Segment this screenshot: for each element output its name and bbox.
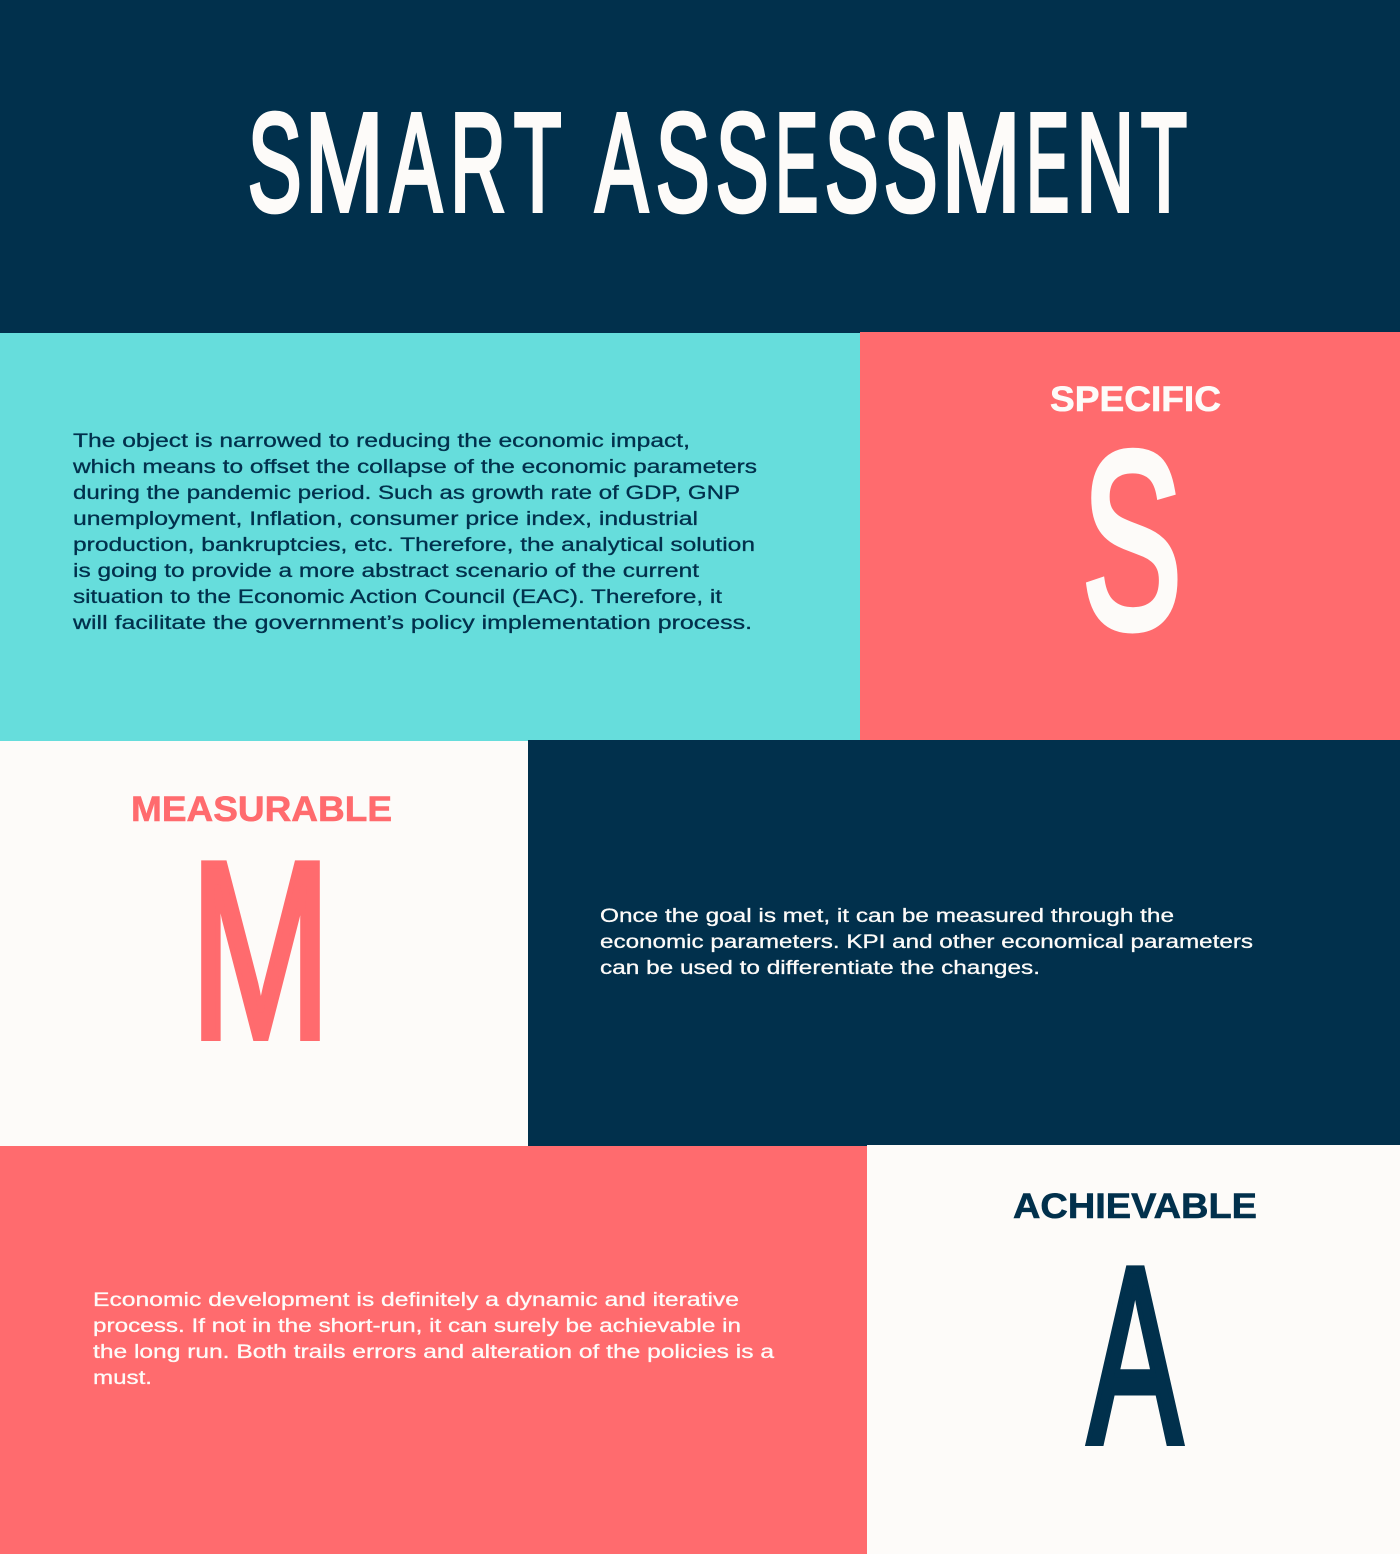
text block: achievable description: Economic development is definitely a dynamic and iterative [93,1289,739,1311]
heading: achievable: ACHIEVABLE [1013,1187,1257,1226]
panel: specific description [0,333,860,741]
text block: specific description: will facilitate the government’s policy implementation process. [72,612,752,634]
title: S [884,84,938,240]
letter M: M [190,811,331,1091]
text block: specific description: is going to provide a more abstract scenario of the current [73,560,700,582]
panel: achievable [867,1145,1400,1554]
text block: achievable description [93,1289,774,1389]
text block: specific description: The object is narrowed to reducing the economic impact, [73,430,690,452]
text block: specific description: during the pandemic period. Such as growth rate of GDP, GNP [73,482,740,504]
heading: measurable: MEASURABLE [131,790,392,829]
text block: achievable description: the long run. Both trails errors and alteration of the policies is a [93,1341,774,1363]
text block: specific description: production, bankruptcies, etc. Therefore, the analytical solution [73,534,755,556]
title: A [390,84,442,240]
title: S [248,84,302,240]
heading: specific: SPECIFIC [1050,380,1221,419]
title: R [450,84,506,240]
panel: achievable description [0,1146,867,1554]
text block: achievable description: process. If not in the short-run, it can surely be achievable in [93,1315,741,1337]
title: S [825,84,879,240]
title: S [656,84,710,240]
title: S [716,84,768,240]
panel: measurable description [528,740,1400,1145]
title: E [775,84,818,240]
text block: measurable description: can be used to differentiate the changes. [600,957,1040,979]
letter S: S [1082,401,1182,681]
text block: achievable description: must. [93,1367,152,1389]
title: T [514,84,560,240]
title: A [596,84,648,240]
text block: measurable description [600,905,1253,979]
text block: specific description [72,430,757,634]
text block: specific description: which means to offset the collapse of the economic parameters [72,456,757,478]
panel: measurable [0,741,528,1146]
title: E [1026,84,1069,240]
header panel [0,0,1400,333]
title: M [942,84,1021,240]
text block: specific description: unemployment, Inflation, consumer price index, industrial [73,508,698,530]
title: N [1076,84,1134,240]
title: T [1141,84,1187,240]
title: M [305,84,384,240]
text block: measurable description: economic parameters. KPI and other economical parameters [600,931,1253,953]
letter A: A [1088,1216,1182,1496]
text block: specific description: situation to the Economic Action Council (EAC). Therefore, it [73,586,723,608]
panel: specific [860,332,1400,740]
text block: measurable description: Once the goal is met, it can be measured through the [600,905,1174,927]
